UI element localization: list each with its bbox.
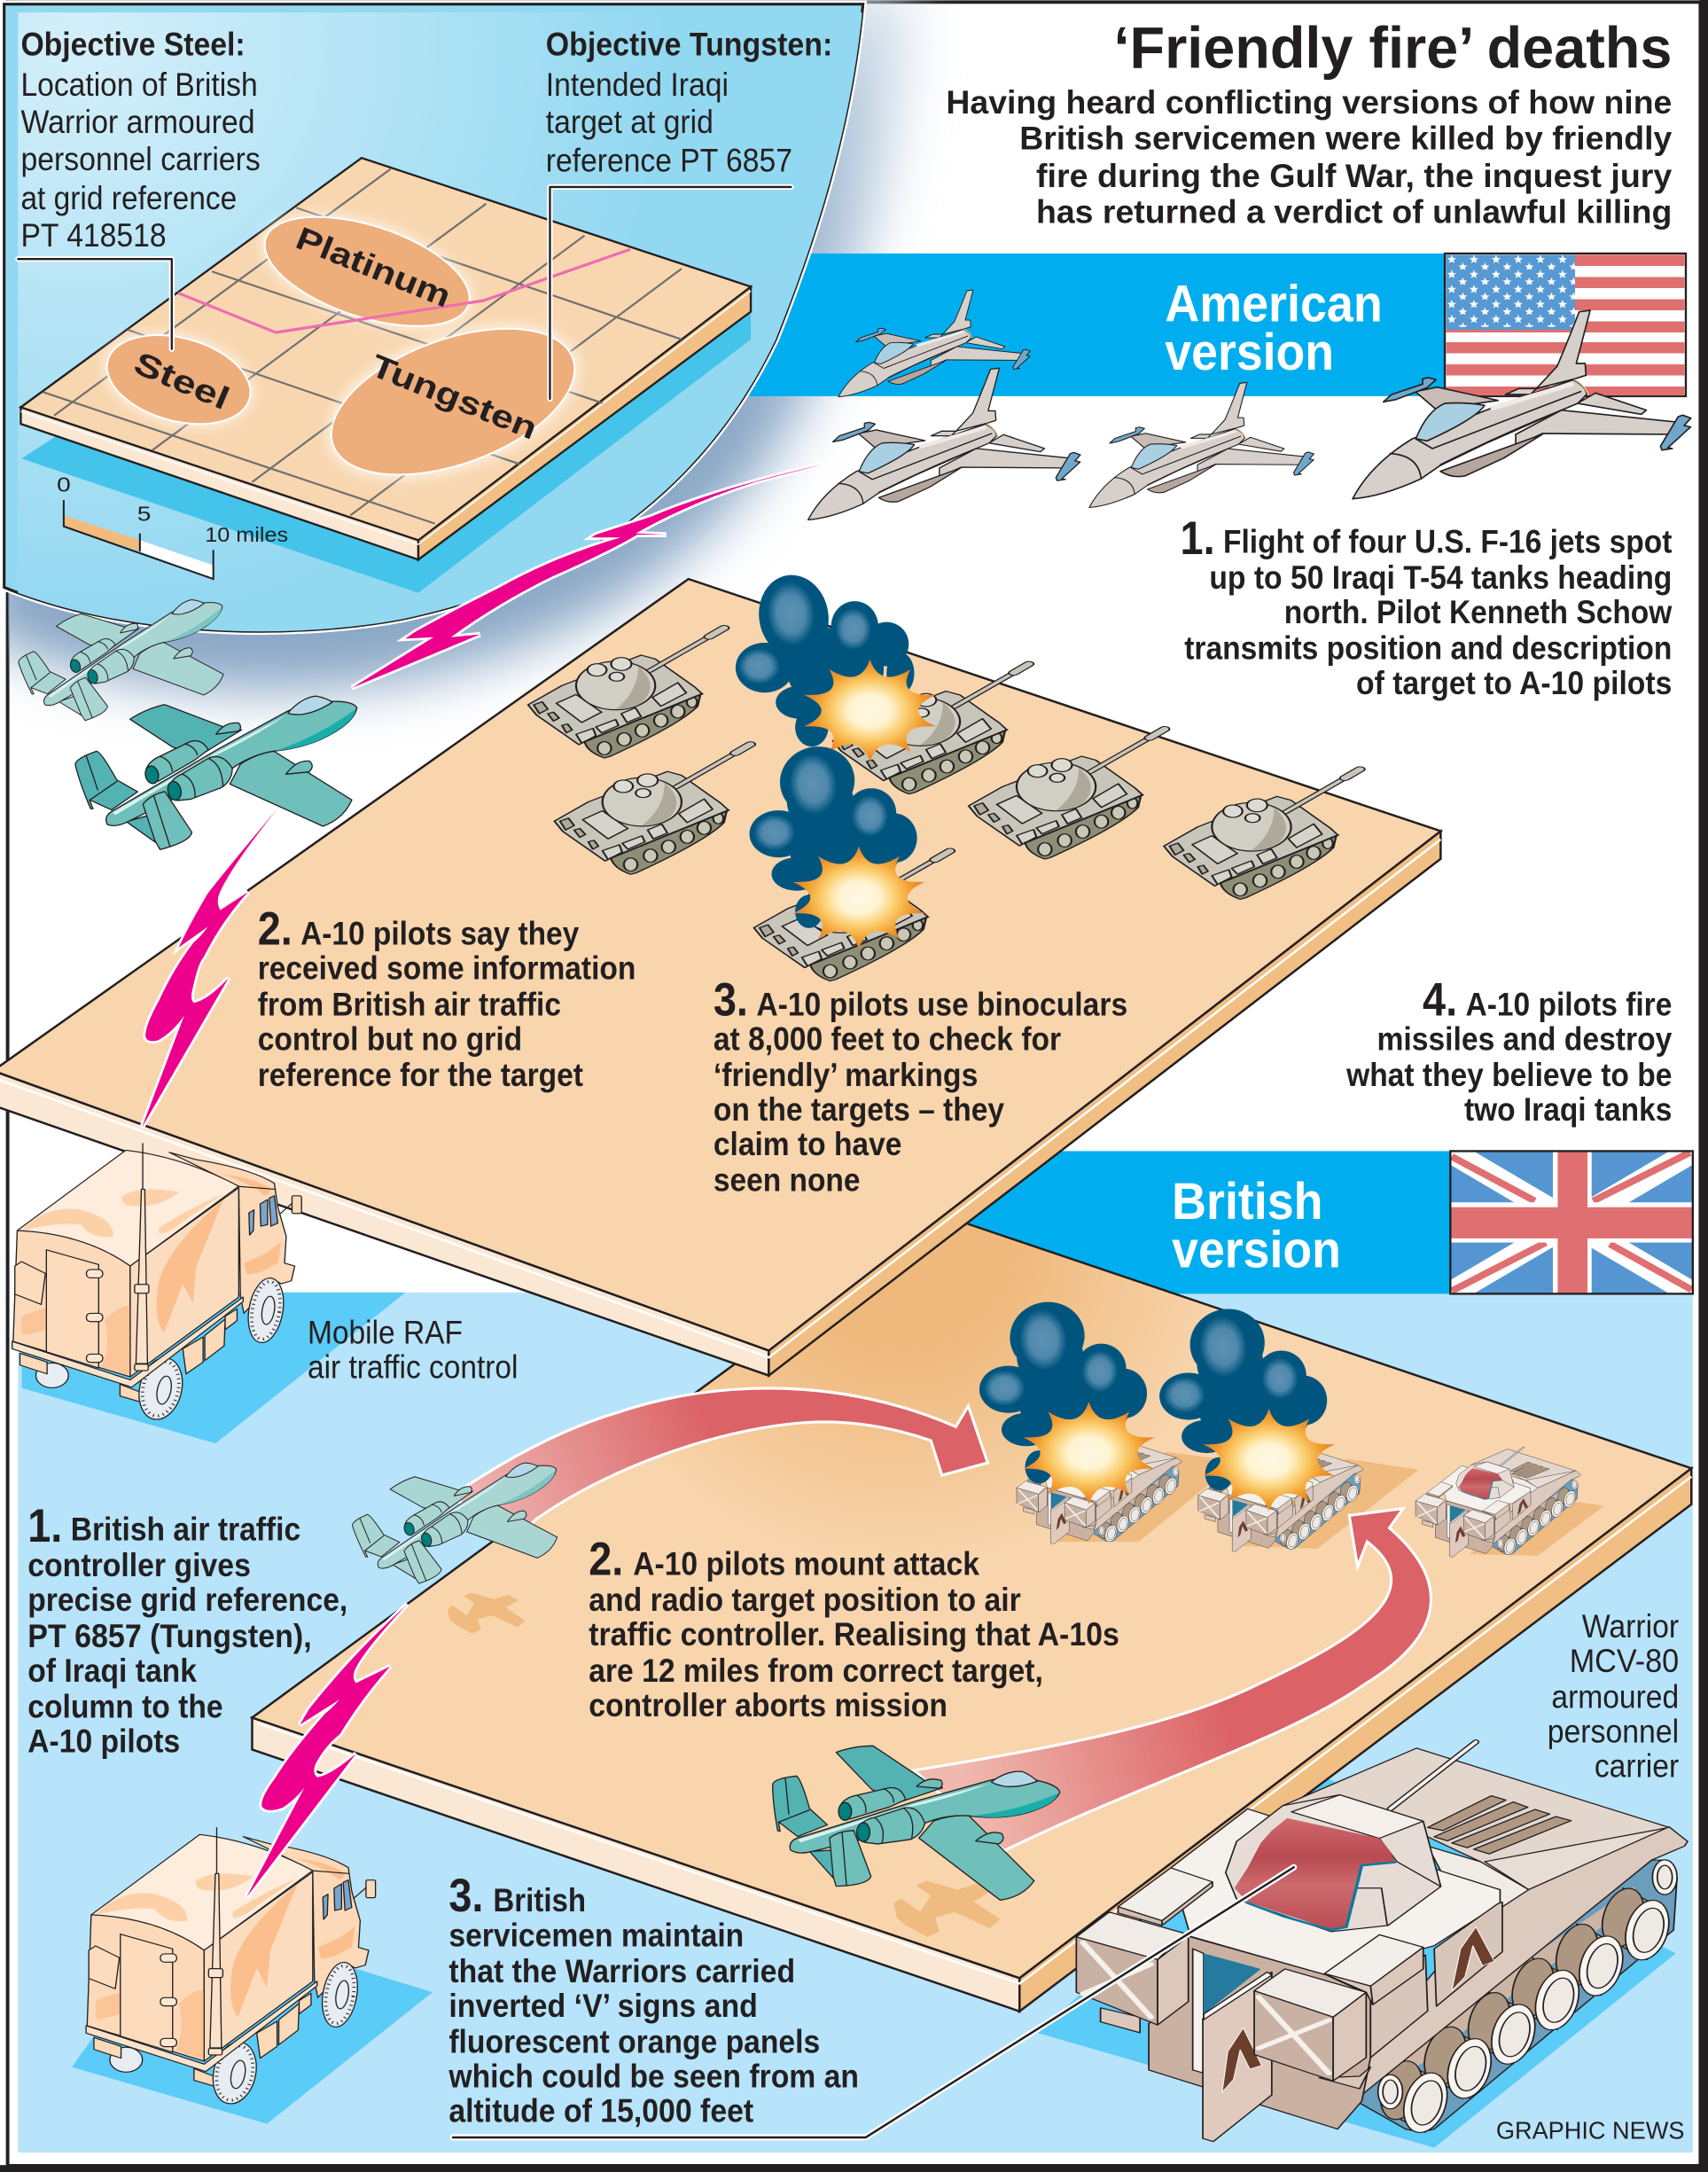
label: Warrior carrier: personnel	[1548, 1713, 1679, 1750]
halo behind map panel	[12, 29, 871, 656]
heading: American version	[1165, 276, 1383, 381]
leader: Tungsten	[550, 187, 791, 399]
text: American step 2: received some information	[258, 949, 636, 987]
text: American step 1: 1.	[1181, 512, 1215, 565]
Warriors on fire	[1017, 1434, 1580, 1557]
A-10: small, British side	[344, 1436, 580, 1607]
text: American step 2: control but no grid	[258, 1020, 522, 1057]
label: Mobile RAF air traffic control: air traffic control	[308, 1348, 519, 1386]
text: British step 1: PT 6857 (Tungsten),	[27, 1617, 312, 1654]
A-10: small, American side	[11, 574, 246, 744]
text: American step 3: 3.	[714, 973, 748, 1026]
lightning: F-16 to A-10	[352, 464, 824, 688]
heading: British version: British	[1172, 1173, 1323, 1231]
text: Objective Steel: Objective Steel:	[20, 26, 246, 62]
heading: American version: version	[1165, 324, 1334, 381]
text: British step 2: 2.	[589, 1534, 623, 1586]
leader: Steel	[18, 259, 172, 349]
text: American step 3: seen none	[714, 1161, 861, 1199]
shadow: big Warrior	[1037, 1777, 1676, 2148]
text: American step 3: A-10 pilots use binoculars	[756, 985, 1127, 1022]
text: British step 3: altitude of 15,000 feet	[448, 2092, 754, 2129]
text: American step 4: missiles and destroy	[1377, 1020, 1672, 1057]
truck: bottom mobile RAF control	[86, 1828, 376, 2106]
flag: Union Jack	[1450, 1151, 1693, 1293]
text: American step 1: of target to A-10 pilots	[1356, 664, 1672, 701]
panel: American version banner	[692, 254, 1447, 396]
text: American step 4	[1345, 973, 1672, 1128]
text: British step 1: column to the	[27, 1688, 223, 1724]
subtitle	[946, 83, 1673, 230]
text: American step 2: 2.	[258, 903, 292, 956]
text: American step 4: what they believe to be	[1345, 1056, 1672, 1093]
text: American step 3: at 8,000 feet to check for	[714, 1020, 1062, 1057]
big Warrior armoured carrier	[1076, 1742, 1688, 2142]
text: American step 1: north. Pilot Kenneth Schow	[1284, 593, 1673, 630]
A-10: large, American side	[66, 662, 381, 878]
text: American step 4: two Iraqi tanks	[1464, 1090, 1672, 1128]
text: American step 2: A-10 pilots say they	[300, 915, 579, 952]
heading: American version: American	[1165, 276, 1383, 332]
label: Warrior carrier	[1548, 1607, 1679, 1785]
text: British step 2	[589, 1534, 1119, 1723]
American slab	[0, 579, 1440, 1376]
arrow: A-10 attack run	[451, 1388, 987, 1541]
shadow: bottom truck	[72, 1950, 433, 2124]
text: American step 3	[714, 973, 1127, 1199]
subtitle: Having heard conflicting versions of how nine	[946, 83, 1672, 121]
text: Objective Tungsten: target at grid	[546, 103, 714, 140]
flag: United States	[1445, 254, 1686, 396]
text: British step 3: which could be seen from an	[448, 2058, 859, 2095]
text: British step 1: controller gives	[27, 1546, 251, 1583]
text: American step 2: reference for the target	[258, 1056, 583, 1093]
text: British step 1: 1.	[27, 1500, 62, 1552]
map label: Tungsten: Tungsten	[366, 347, 542, 447]
leader: Warrior markings	[453, 1867, 1294, 2137]
text: British step 3	[448, 1870, 859, 2129]
A-10: large, British side	[773, 1746, 1060, 1900]
map slab	[20, 158, 751, 559]
text: British step 2: are 12 miles from correct target,	[589, 1652, 1043, 1689]
text: American step 2: from British air traffic	[258, 985, 561, 1022]
subtitle: has returned a verdict of unlawful killing	[1036, 193, 1672, 230]
label: Warrior carrier: Warrior	[1582, 1607, 1679, 1645]
text: American step 4: A-10 pilots fire	[1466, 985, 1672, 1022]
text: British step 2: controller aborts mission	[589, 1686, 948, 1723]
text: Objective Steel: personnel carriers	[20, 140, 261, 177]
text: British step 1	[27, 1500, 347, 1760]
explosion: second tank	[750, 740, 924, 949]
panel: map of objectives	[4, 4, 866, 636]
subtitle: British servicemen were killed by friendly	[1019, 120, 1673, 157]
text: British step 3: fluorescent orange panels	[448, 2023, 820, 2060]
text: British step 3: that the Warriors carried	[448, 1952, 795, 1989]
scale bar	[57, 473, 288, 579]
text: Objective Tungsten	[546, 26, 832, 179]
explosion: first Warrior	[979, 1296, 1155, 1504]
text: American step 3: claim to have	[714, 1125, 901, 1162]
text: American step 3: on the targets – they	[714, 1090, 1004, 1128]
lightning: truck to A-10	[142, 809, 277, 1128]
text: Objective Steel: Location of British	[20, 66, 258, 103]
text: Objective Steel: Warrior armoured	[20, 103, 255, 140]
text: Objective Tungsten: reference PT 6857	[546, 142, 792, 179]
text: British step 2: and radio target position to air	[589, 1581, 1021, 1618]
label: Warrior carrier: armoured	[1551, 1678, 1679, 1715]
title: ‘Friendly fire’ deaths	[1114, 16, 1672, 81]
text: American step 1	[1181, 512, 1673, 701]
text: American step 3: ‘friendly’ markings	[714, 1056, 978, 1093]
tanks	[528, 628, 1360, 981]
label: Mobile RAF air traffic control	[308, 1314, 519, 1386]
text: Objective Tungsten: Objective Tungsten:	[546, 26, 832, 62]
text: British step 2: A-10 pilots mount attack	[633, 1545, 979, 1582]
heading: British version	[1172, 1173, 1341, 1279]
text: British step 1: precise grid reference,	[27, 1581, 347, 1618]
text: Objective Steel: PT 418518	[20, 216, 167, 254]
vehicle shadows on British slab	[448, 1452, 1604, 1937]
scale bar: 0	[57, 473, 71, 496]
heading: British version: version	[1172, 1222, 1341, 1279]
explosion: second Warrior	[1159, 1303, 1335, 1512]
scale bar: 5	[137, 503, 151, 525]
text: British step 1: British air traffic	[71, 1511, 300, 1547]
map label: Platinum: Platinum	[291, 220, 456, 315]
text: British step 3: servicemen maintain	[448, 1916, 744, 1953]
subtitle: fire during the Gulf War, the inquest jury	[1036, 157, 1673, 194]
credit: GRAPHIC NEWS	[1496, 2117, 1684, 2144]
label: Warrior carrier: MCV-80	[1570, 1642, 1679, 1679]
text: American step 4: 4.	[1423, 973, 1457, 1026]
text: Objective Steel: at grid reference	[20, 179, 237, 216]
shadow: top truck	[22, 1293, 405, 1443]
text: Objective Tungsten: Intended Iraqi	[546, 66, 729, 103]
British slab	[252, 1191, 1691, 2012]
text: American step 2	[258, 903, 636, 1093]
panel: British background	[18, 1293, 1693, 2152]
label: Mobile RAF air traffic control: Mobile RAF	[308, 1314, 463, 1351]
text: British step 2: traffic controller. Realising that A-10s	[589, 1615, 1119, 1652]
text: British step 1: of Iraqi tank	[27, 1652, 197, 1689]
text: Objective Steel	[20, 26, 261, 254]
text: British step 1: A-10 pilots	[27, 1723, 180, 1760]
label: Warrior carrier: carrier	[1595, 1747, 1679, 1785]
jets: four F-16s	[808, 290, 1691, 520]
text: British step 3: British	[493, 1881, 586, 1918]
text: British step 3: 3.	[448, 1870, 483, 1922]
lightning: truck to A-10, British	[246, 1604, 407, 1897]
explosion: first tank	[736, 569, 936, 762]
map label: Steel: Steel	[129, 344, 235, 417]
text: British step 3: inverted ‘V’ signs and	[448, 1987, 758, 2024]
truck: top mobile RAF control	[12, 1144, 301, 1422]
panel: British version banner	[914, 1151, 1455, 1293]
arrow: A-10 return run	[914, 1509, 1431, 1851]
scale bar: 10 miles	[205, 523, 288, 546]
